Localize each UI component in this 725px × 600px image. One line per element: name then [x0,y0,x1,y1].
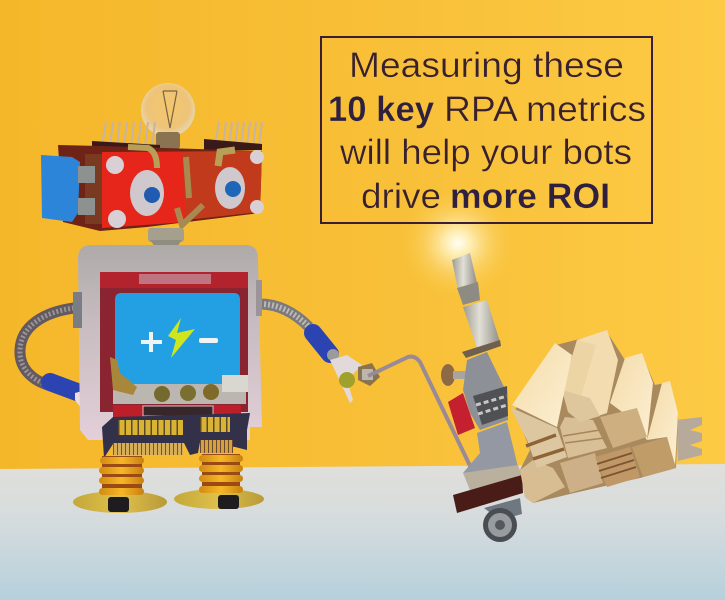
glowing lamp post [452,253,501,358]
heading line 1: Measuring these [349,46,624,85]
floor [0,464,725,600]
head casing [58,145,262,231]
wooden blocks [510,330,702,503]
light bulb [141,83,195,149]
background wall [0,0,725,470]
head bolts and brackets [106,147,264,228]
heading line 2 [328,90,646,129]
block A [510,343,572,468]
heading line 4 [361,177,610,216]
left foot [73,491,167,513]
circuit board [100,272,248,412]
middle block [560,417,607,458]
right spring [199,454,243,493]
lightning bolt [168,318,195,358]
minus sign [199,338,218,343]
robot body [73,245,262,458]
truck frame [463,352,508,430]
heading line 2: RPA metrics [444,90,646,129]
heading line 4: more ROI [450,177,610,216]
adjuster knob [441,364,467,386]
robot right arm [260,304,380,403]
pin headers [102,122,262,146]
connector with gold teeth [102,413,250,458]
eyes [130,167,245,216]
block D [632,381,678,477]
bottom row [520,460,565,503]
robot head [41,83,264,231]
left spring [99,456,144,495]
heading box [321,37,652,223]
heading line 3: will help your bots [339,133,632,172]
screws [154,386,170,402]
rear fork [676,417,702,461]
right foot [174,489,264,509]
neck [148,228,184,256]
light glow [400,187,516,299]
robot left arm [20,308,120,430]
truck base plate [453,475,523,513]
block B [562,330,618,422]
blue side block [41,155,95,222]
heading line 2: 10 key [328,90,435,129]
block C [600,353,653,448]
block stack shadow backing [515,332,678,503]
red strip [113,405,241,417]
red switch [448,393,475,435]
springs and feet [73,454,264,513]
hand truck [368,253,523,542]
wheel [483,498,522,542]
heading line 4: drive [361,177,441,216]
plus sign [141,332,162,352]
robot [20,83,380,513]
handle [368,357,473,472]
blue screen with charge symbols [115,293,240,384]
